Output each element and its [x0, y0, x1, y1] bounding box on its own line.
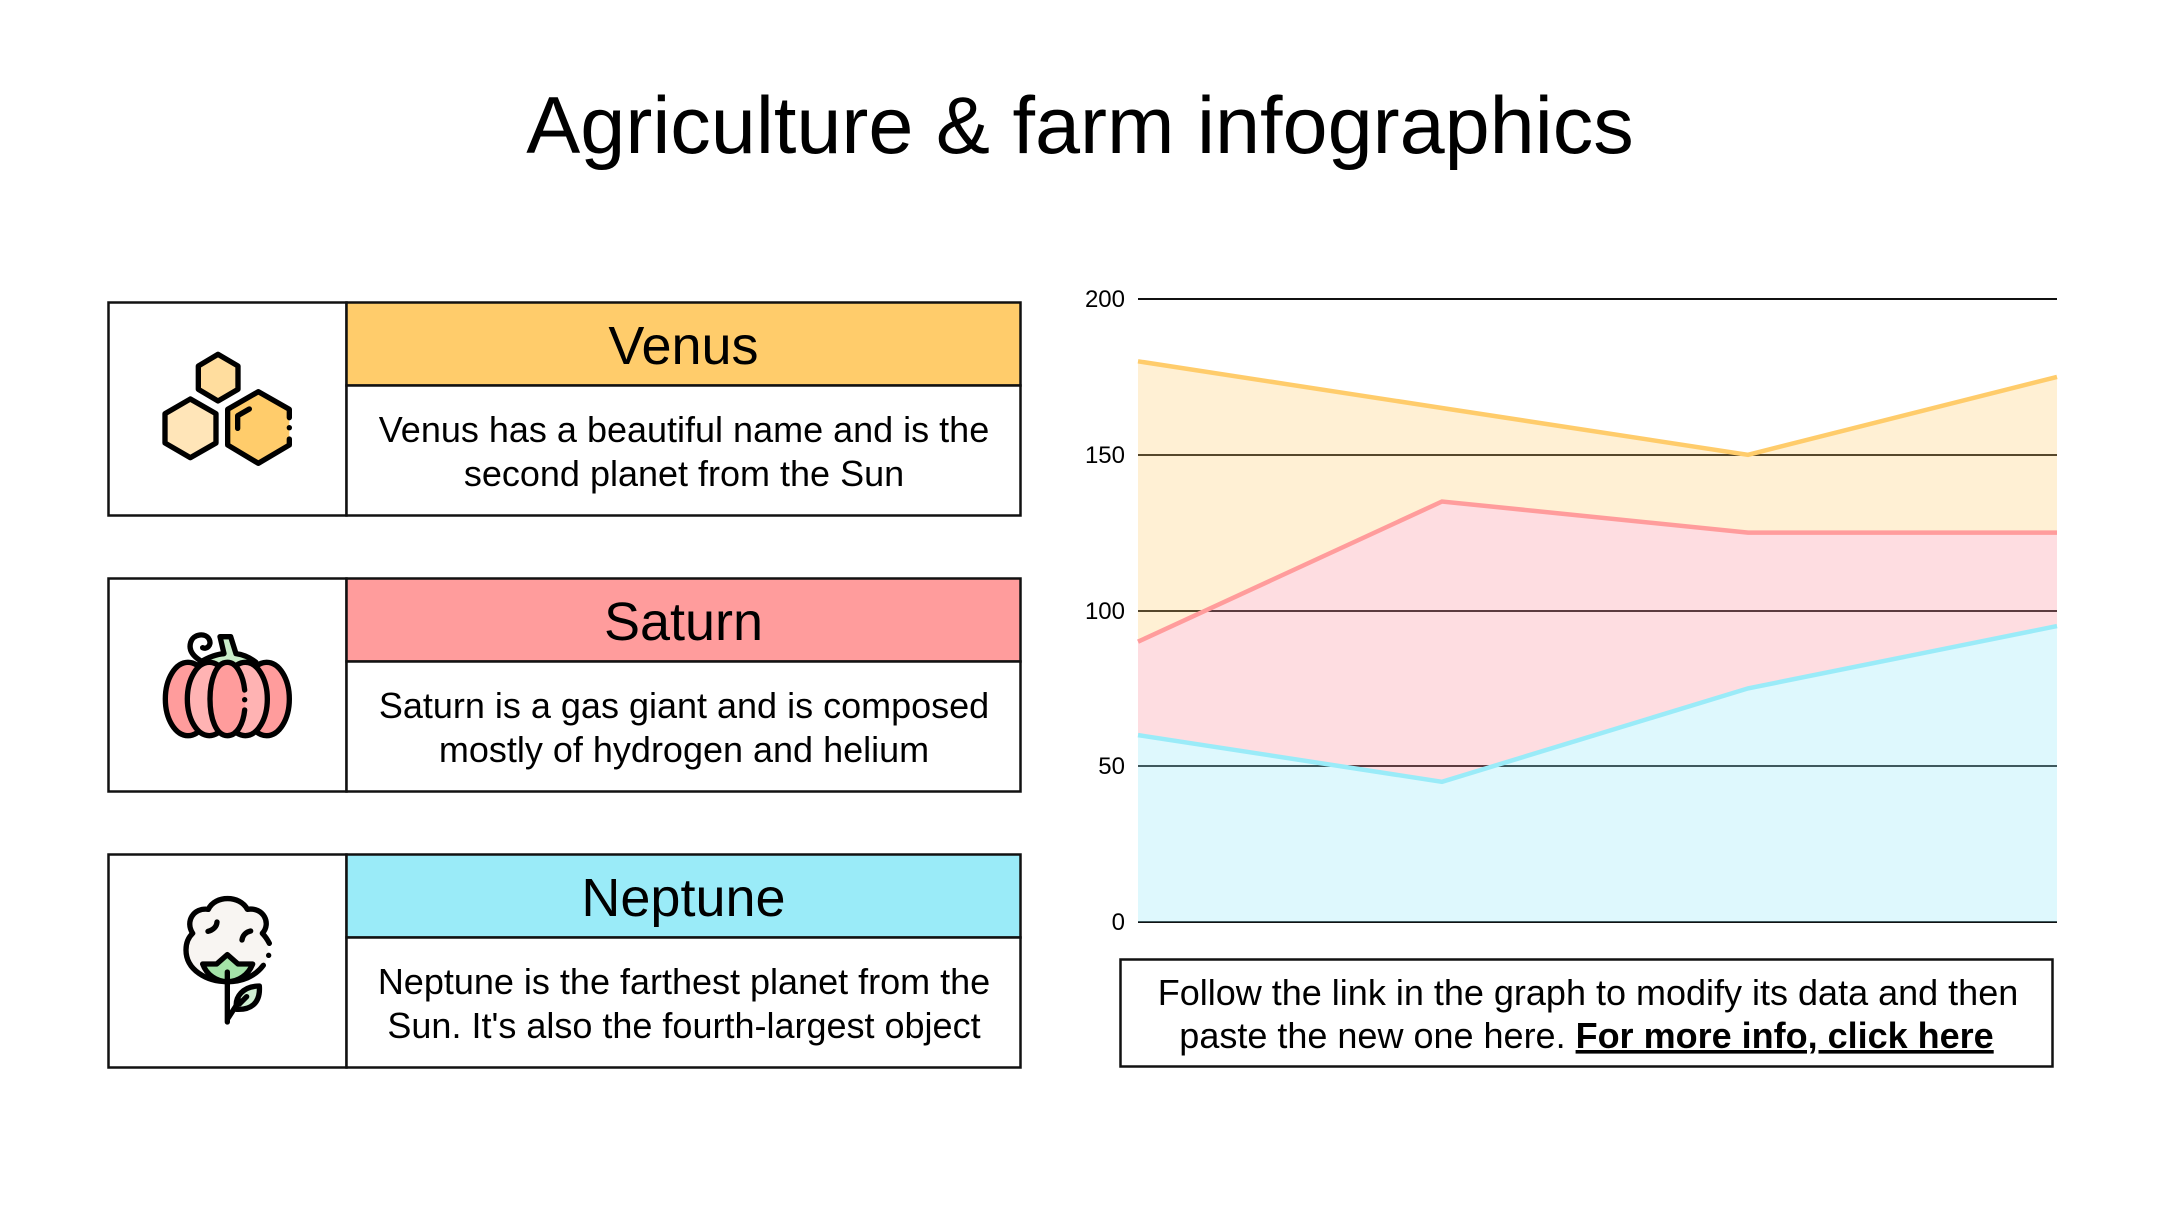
description: Venus — [346, 386, 1020, 516]
description: Neptune — [346, 938, 1020, 1068]
header: Saturn: Saturn — [604, 592, 763, 652]
y axis labels: 50 — [1098, 753, 1125, 780]
title: Agriculture & farm infographics — [526, 81, 1634, 171]
header: Neptune: Neptune — [581, 868, 786, 928]
description: Saturn: Saturn is a gas giant and is composed — [379, 685, 989, 726]
note box — [1120, 960, 2052, 1066]
y axis labels — [1085, 286, 1125, 936]
header: Venus: Venus — [608, 316, 759, 376]
series: yellow area — [1138, 361, 2057, 642]
panel: Venus — [108, 302, 1020, 516]
description: Saturn: mostly of hydrogen and helium — [439, 729, 929, 770]
description: Neptune: Sun. It's also the fourth-largest object — [387, 1005, 981, 1046]
icon: cotton plant — [186, 899, 269, 1022]
description: Venus: second planet from the Sun — [464, 453, 904, 494]
panel: Neptune — [108, 854, 1020, 1068]
header: Neptune — [346, 854, 1020, 938]
grid lines — [1138, 299, 2057, 922]
description: Venus: Venus has a beautiful name and is the — [379, 409, 989, 450]
icon box: Saturn — [108, 578, 346, 792]
area chart — [1085, 286, 2057, 936]
header: Venus — [346, 302, 1020, 386]
icon: pumpkin — [165, 635, 289, 736]
y axis labels: 0 — [1112, 909, 1125, 936]
icon box: Venus — [108, 302, 346, 516]
note box: Follow the link in the graph to modify its data and then — [1158, 972, 2018, 1013]
header: Saturn — [346, 578, 1020, 662]
note box: paste the new one here. For more info, click here — [1179, 1015, 1994, 1056]
description: Neptune: Neptune is the farthest planet from the — [378, 961, 990, 1002]
y axis labels: 150 — [1085, 442, 1125, 469]
y axis labels: 200 — [1085, 286, 1125, 313]
y axis labels: 100 — [1085, 598, 1125, 625]
icon: honeycomb — [165, 354, 289, 463]
series: pink area — [1138, 502, 2057, 782]
series: blue area — [1138, 626, 2057, 922]
icon box: Neptune — [108, 854, 346, 1068]
panel: Saturn — [108, 578, 1020, 792]
description: Saturn — [346, 662, 1020, 792]
